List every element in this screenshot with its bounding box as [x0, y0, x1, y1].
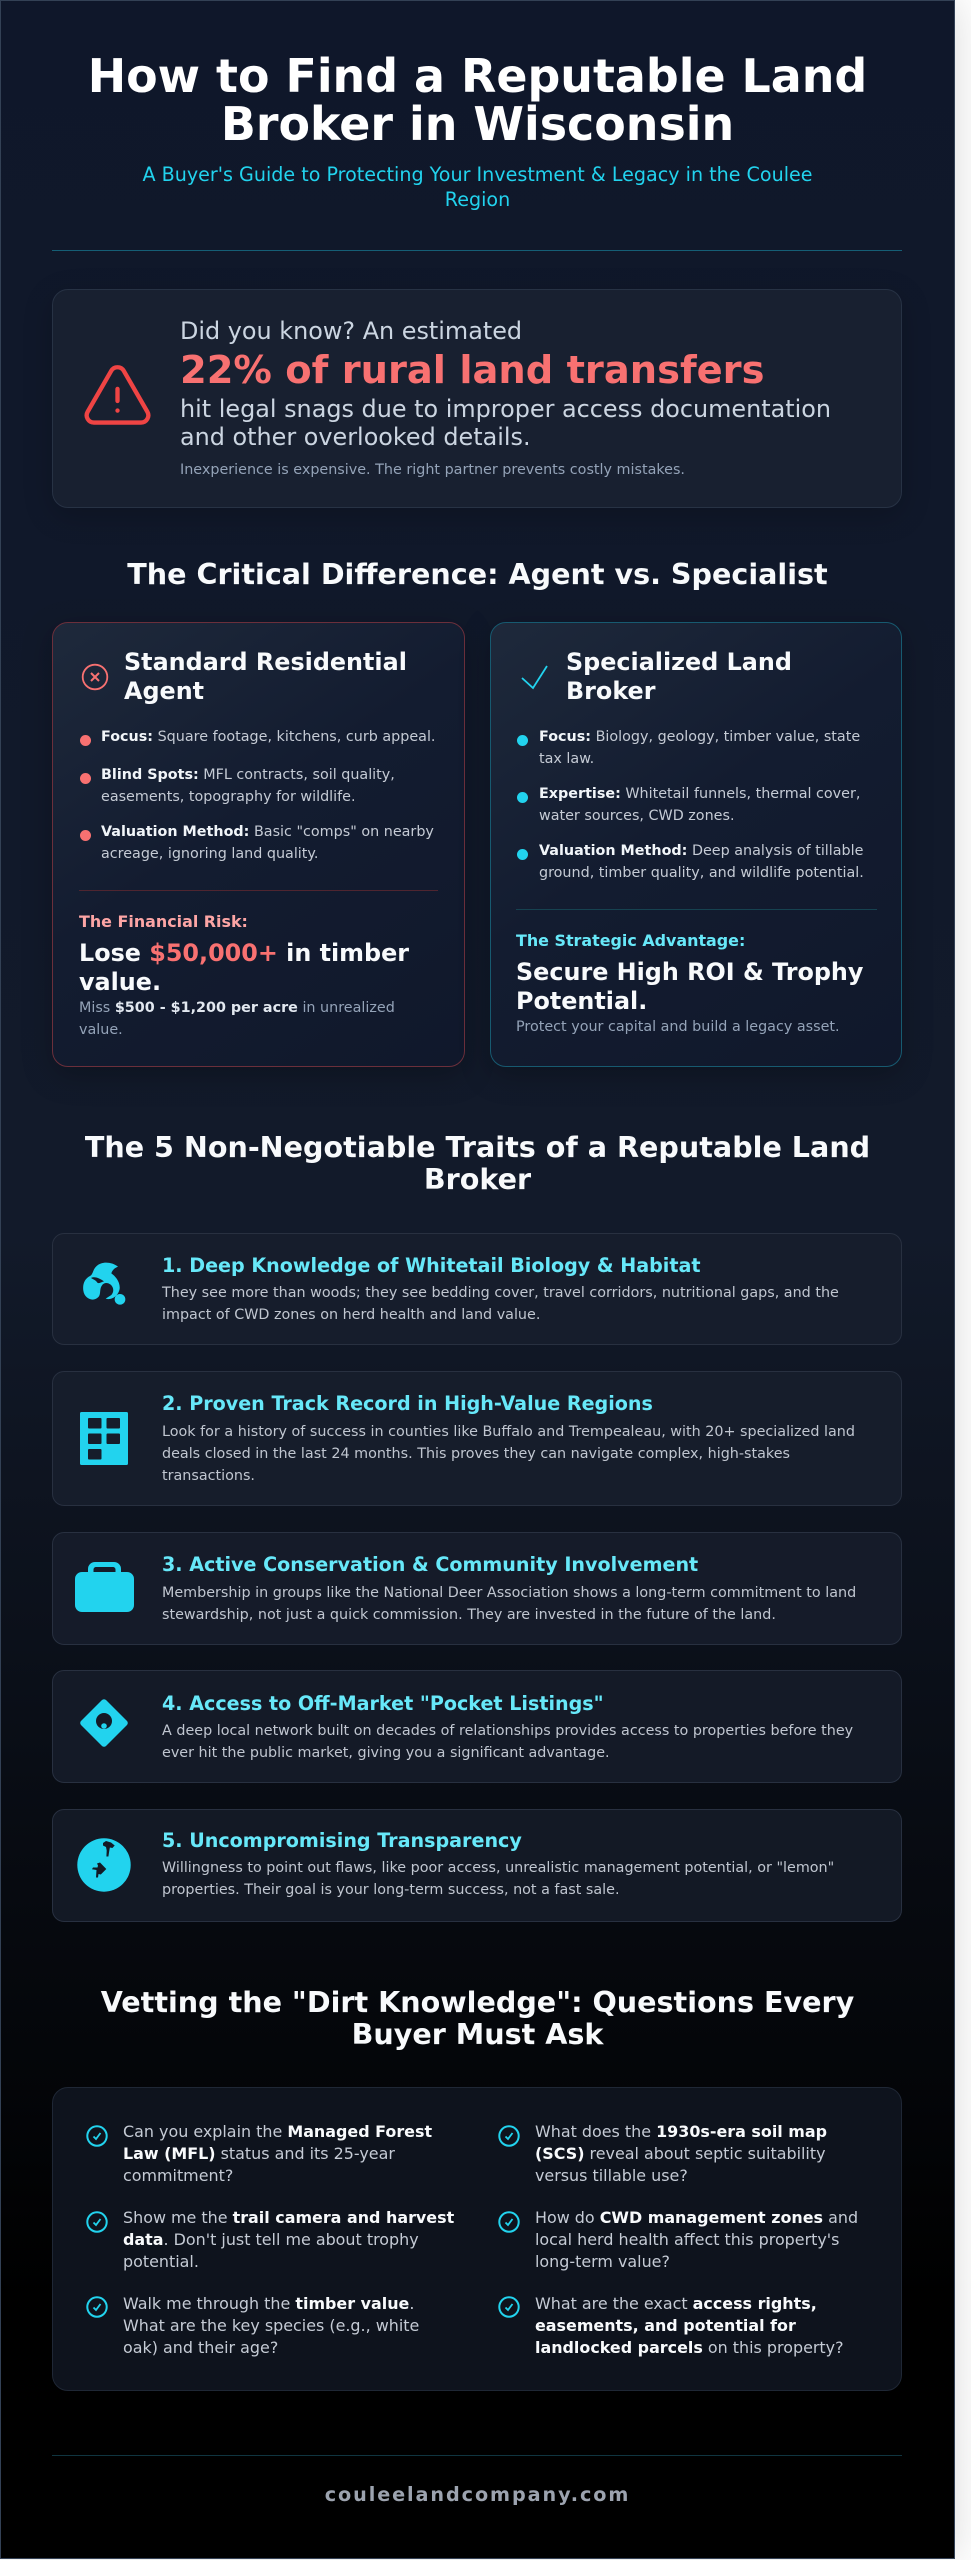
question 4: What does the 1930s-era soil map [535, 2122, 827, 2140]
question 6: landlocked parcels on this property? [535, 2338, 844, 2357]
bullet: focus [539, 728, 860, 767]
text: secure ROI: Secure High ROI & Trophy [516, 958, 863, 986]
icon: check circle 5 [498, 2211, 520, 2233]
bullet: focus: Focus: Square footage, kitchens, curb appeal. [101, 728, 436, 744]
trait 4 description [162, 1722, 853, 1760]
trait 5 description: Willingness to point out flaws, like poor access, unrealistic management potential, or "lemon" [162, 1860, 834, 1876]
text: per acre miss: Miss $500 - $1,200 per acre in unrealized [79, 1000, 395, 1016]
footer website: couleelandcompany.com [325, 2483, 630, 2506]
heading: land broker: Broker [566, 677, 655, 705]
question 6: What are the exact access rights, [535, 2294, 817, 2312]
trait 2 title: 2. Proven Track Record in High-Value Regions [162, 1392, 653, 1415]
bullet: valuation: Valuation Method: Basic "comps" on nearby [101, 824, 434, 840]
panel: questions [52, 2087, 902, 2391]
question 5: long-term value? [535, 2252, 670, 2271]
text: financial loss: value. [79, 968, 161, 996]
bullet dot [517, 849, 528, 860]
title: How to Find a Reputable Land [88, 49, 867, 103]
panel: trait 4 [52, 1670, 902, 1783]
bullet: focus: tax law. [539, 751, 594, 767]
trait 2 description: deals closed in the last 24 months. This proves they can navigate complex, high-stakes [162, 1446, 790, 1462]
question 1: Law (MFL) status and its 25-year [123, 2144, 395, 2163]
heading: critical difference: The Critical Difference: Agent vs. Specialist [127, 557, 828, 591]
icon: building grid [80, 1412, 128, 1465]
question 6: easements, and potential for [535, 2316, 796, 2335]
bullet: valuation: acreage, ignoring land quality. [101, 846, 318, 862]
heading: five traits: Broker [424, 1162, 531, 1196]
icon: warning triangle [84, 365, 151, 425]
heading: five traits [85, 1130, 870, 1196]
bullet: blind spots: Blind Spots: MFL contracts, soil quality, [101, 766, 395, 782]
question 4: versus tillable use? [535, 2166, 688, 2185]
icon: check circle 6 [498, 2296, 520, 2318]
heading: land broker [566, 648, 792, 705]
icon: check mark [522, 666, 548, 690]
subtitle: A Buyer's Guide to Protecting Your Investment & Legacy in the Coulee [142, 162, 813, 186]
heading: five traits: The 5 Non-Negotiable Traits of a Reputable Land [85, 1130, 870, 1164]
text: secure ROI: Potential. [516, 986, 647, 1014]
heading: dirt knowledge: Buyer Must Ask [352, 2017, 603, 2051]
question 3: oak) and their age? [123, 2338, 278, 2357]
icon: compass globe [77, 1838, 131, 1892]
trait 2 description [162, 1424, 855, 1484]
icon: briefcase [75, 1562, 134, 1612]
question 2 [123, 2208, 454, 2271]
trait 4 description: A deep local network built on decades of relationships provides access to properties before they [162, 1722, 853, 1738]
subtitle: Region [445, 188, 510, 211]
bullet: expertise: Expertise: Whitetail funnels, thermal cover, [539, 786, 860, 802]
label: financial risk: The Financial Risk: [79, 912, 248, 931]
list: agent points [80, 728, 436, 862]
question 3 [123, 2294, 419, 2357]
question 1 [123, 2122, 432, 2185]
trait 3 title: 3. Active Conservation & Community Involvement [162, 1553, 698, 1576]
panel: trait 2 [52, 1371, 902, 1506]
heading: dirt knowledge: Vetting the "Dirt Knowledge": Questions Every [101, 1985, 854, 2019]
text: financial loss: Lose $50,000+ in timber [79, 938, 409, 966]
question 4: (SCS) reveal about septic suitability [535, 2144, 826, 2163]
bullet: expertise: water sources, CWD zones. [539, 808, 734, 824]
trait 5 description [162, 1860, 834, 1898]
subtitle [142, 162, 813, 211]
text: secure ROI [516, 958, 863, 1014]
text: per acre miss: value. [79, 1022, 123, 1038]
trait 2 description: Look for a history of success in counties like Buffalo and Trempealeau, with 20+ specialized land [162, 1424, 855, 1440]
bullet dot [517, 735, 528, 746]
heading: standard agent [124, 648, 407, 705]
list: broker points [517, 728, 864, 881]
question 1: commitment? [123, 2166, 233, 2185]
question 5: local herd health affect this property's [535, 2230, 839, 2249]
heading: land broker: Specialized Land [566, 648, 792, 676]
icon: deer track swirl [83, 1262, 126, 1305]
bullet: valuation: ground, timber quality, and wildlife potential. [539, 865, 864, 881]
text: 22% statistic: 22% of rural land transfers [180, 348, 764, 393]
text: alert explanation: and other overlooked details. [180, 423, 531, 451]
icon: check circle 3 [86, 2296, 108, 2318]
trait 5 title: 5. Uncompromising Transparency [162, 1829, 522, 1852]
question 5 [535, 2206, 858, 2273]
question 1: Can you explain the Managed Forest [123, 2122, 432, 2140]
panel: trait 3 [52, 1532, 902, 1645]
heading: standard agent: Standard Residential [124, 648, 407, 676]
question 2: data. Don't just tell me about trophy [123, 2230, 419, 2249]
trait 5 description: properties. Their goal is your long-term success, not a fast sale. [162, 1882, 620, 1898]
trait 1 title: 1. Deep Knowledge of Whitetail Biology & Habitat [162, 1254, 701, 1276]
question 3: What are the key species (e.g., white [123, 2316, 419, 2335]
panel: specialized land broker [490, 622, 902, 1067]
icon: diamond marker [80, 1699, 128, 1747]
text: alert footnote: Inexperience is expensive. The right partner prevents costly mistakes. [180, 462, 685, 478]
panel: standard residential agent [52, 622, 465, 1067]
bullet: focus: Focus: Biology, geology, timber value, state [539, 728, 860, 744]
trait 1 description: They see more than woods; they see bedding cover, travel corridors, nutritional gaps, and the [162, 1285, 839, 1301]
bullet: blind spots: easements, topography for wildlife. [101, 789, 356, 805]
trait 2 description: transactions. [162, 1468, 255, 1484]
question 2: Show me the trail camera and harvest [123, 2208, 454, 2226]
text: per acre miss [79, 1000, 395, 1038]
trait 4 title: 4. Access to Off-Market "Pocket Listings" [162, 1692, 604, 1714]
trait 4 description: ever hit the public market, giving you a significant advantage. [162, 1744, 610, 1760]
trait 3 description: stewardship, not just a quick commission. They are invested in the future of the land. [162, 1607, 776, 1623]
trait 3 description [162, 1585, 856, 1623]
question 4 [535, 2122, 827, 2185]
bullet dot [80, 734, 90, 746]
title [88, 49, 867, 151]
bullet: valuation [539, 843, 864, 881]
bullet dot [80, 830, 90, 840]
heading: standard agent: Agent [124, 677, 204, 705]
label: strategic advantage: The Strategic Advantage: [516, 931, 745, 950]
bullet: blind spots [101, 766, 395, 805]
text: financial loss [79, 938, 409, 996]
heading: dirt knowledge [100, 1985, 854, 2051]
bullet: valuation [101, 824, 434, 862]
question 5: How do CWD management zones and [535, 2208, 858, 2226]
question 2: potential. [123, 2252, 199, 2271]
panel: trait 5 [52, 1809, 902, 1922]
panel: did you know alert [52, 289, 902, 508]
title: Broker in Wisconsin [221, 97, 734, 151]
text: alert explanation: hit legal snags due to improper access documentation [180, 394, 831, 422]
bullet: valuation: Valuation Method: Deep analysis of tillable [539, 843, 863, 859]
icon: check circle 1 [86, 2125, 108, 2147]
bullet dot [517, 792, 528, 803]
icon: check circle 4 [498, 2125, 520, 2147]
icon: check circle 2 [86, 2211, 108, 2233]
bullet dot [80, 772, 90, 784]
panel: trait 1 [52, 1233, 902, 1345]
trait 3 description: Membership in groups like the National Deer Association shows a long-term commitment to land [162, 1585, 856, 1601]
question 3: Walk me through the timber value. [123, 2294, 414, 2312]
text: did you know lead: Did you know? An estimated [180, 316, 522, 344]
text: alert explanation [180, 394, 831, 451]
text: protect capital: Protect your capital and build a legacy asset. [516, 1018, 840, 1034]
trait 1 description: impact of CWD zones on herd health and land value. [162, 1307, 540, 1323]
icon: x circle [82, 664, 108, 690]
trait 1 description [162, 1285, 839, 1323]
question 6 [535, 2292, 844, 2359]
bullet: expertise [539, 786, 860, 824]
